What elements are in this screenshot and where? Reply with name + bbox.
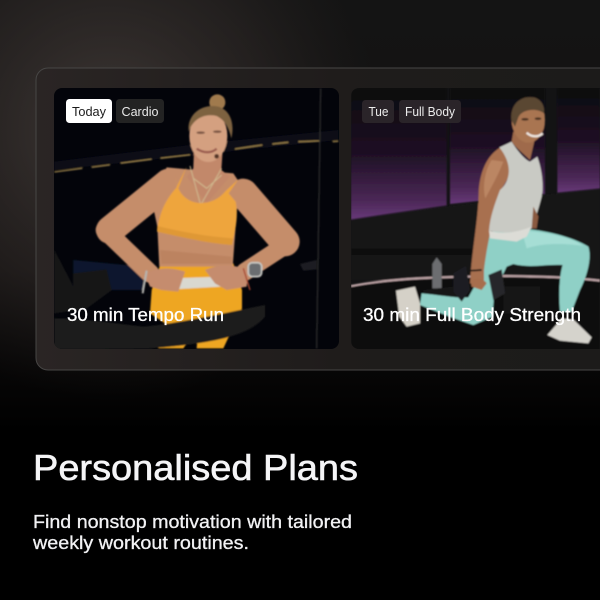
description: Find nonstop motivation with tailored bbox=[33, 511, 352, 532]
water bottle bbox=[432, 257, 442, 288]
back shoe bbox=[396, 287, 420, 327]
description bbox=[32, 511, 352, 553]
torso bbox=[152, 167, 247, 267]
face details bbox=[196, 131, 205, 134]
caption: 30 min Full Body Strength: 30 min Full Body Strength bbox=[363, 304, 581, 325]
tag: Full Body: Full Body bbox=[405, 104, 455, 119]
belt and hands bbox=[170, 277, 222, 289]
tag: Cardio: Cardio bbox=[122, 104, 158, 119]
neck and head bbox=[512, 132, 535, 160]
neck bbox=[192, 152, 225, 174]
tag: Today: Today bbox=[72, 104, 106, 119]
caption: 30 min Tempo Run: 30 min Tempo Run bbox=[67, 304, 224, 325]
legs bbox=[420, 228, 590, 325]
tag: Today bbox=[66, 99, 112, 123]
legs bbox=[150, 263, 242, 348]
photo: instructor in yellow bbox=[54, 88, 338, 349]
necklace bbox=[190, 166, 222, 205]
tag: Tue: Tue bbox=[368, 104, 388, 119]
card: today's tempo run bbox=[54, 88, 339, 349]
bun bbox=[209, 94, 225, 110]
description: weekly workout routines. bbox=[32, 532, 249, 553]
card: Tuesday full body bbox=[351, 88, 600, 350]
arm bbox=[470, 147, 515, 283]
tank top bbox=[489, 142, 543, 232]
bike seat and frame bbox=[54, 250, 112, 313]
photo: instructor lunging bbox=[351, 88, 600, 350]
dumbbell bbox=[453, 266, 470, 302]
treadmill bbox=[54, 305, 265, 349]
yellow bra bbox=[157, 167, 238, 245]
tag: Full Body bbox=[399, 100, 461, 123]
tag: Cardio bbox=[116, 99, 164, 123]
tag: Tue bbox=[362, 100, 394, 123]
panel: workout carousel bbox=[36, 68, 600, 370]
heading: Personalised Plans bbox=[33, 447, 358, 488]
dark equipment bbox=[423, 287, 540, 313]
front shoe bbox=[547, 318, 592, 343]
head bbox=[189, 110, 227, 162]
hair bbox=[189, 106, 233, 138]
shoulders and arms bbox=[105, 183, 288, 273]
